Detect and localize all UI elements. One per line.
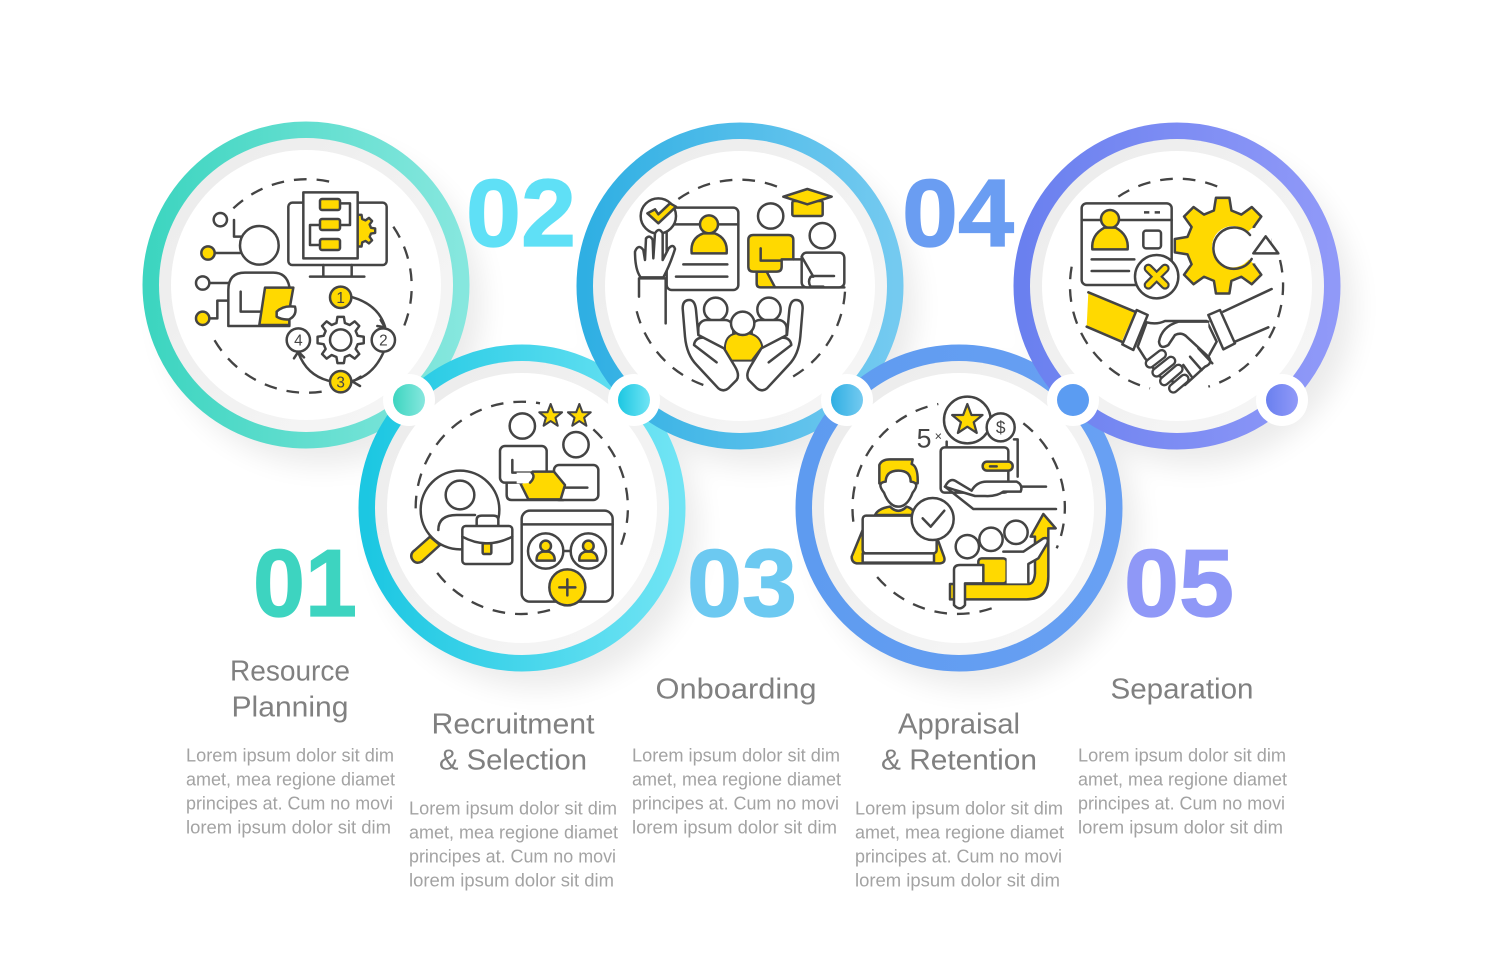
- text block 3: Onboarding: [632, 674, 841, 838]
- text block 4: Appraisal & Retention: principes at. Cum no movi: [855, 846, 1062, 866]
- icon: resource planning: 4: [294, 333, 303, 350]
- text block 4: Appraisal & Retention: [855, 708, 1064, 890]
- icon: appraisal and retention: ×: [935, 430, 942, 444]
- text block 1: Resource Planning: principes at. Cum no movi: [186, 794, 393, 814]
- text block 4: Appraisal & Retention: & Retention: [881, 744, 1037, 776]
- text block 5: Separation: Lorem ipsum dolor sit dim: [1078, 746, 1286, 766]
- text block 1: Resource Planning: Resource: [230, 656, 350, 688]
- icon: appraisal and retention: $: [996, 417, 1006, 437]
- text block 2: Recruitment & Selection: amet, mea regione diamet: [409, 822, 618, 842]
- icon: resource planning: [196, 179, 412, 393]
- text block 3: Onboarding: lorem ipsum dolor sit dim: [632, 818, 837, 838]
- number 05: 05: [1124, 530, 1234, 637]
- text block 5: Separation: lorem ipsum dolor sit dim: [1078, 818, 1283, 838]
- text block 3: Onboarding: amet, mea regione diamet: [632, 770, 841, 790]
- text block 2: Recruitment & Selection: Lorem ipsum dolor sit dim: [409, 798, 617, 818]
- connector nodes: [383, 374, 1308, 426]
- icon: separation: [1070, 179, 1283, 388]
- ring 2: [367, 353, 677, 663]
- text block 2: Recruitment & Selection: principes at. Cum no movi: [409, 846, 616, 866]
- icon: onboarding: [635, 180, 845, 390]
- text block 3: Onboarding: Lorem ipsum dolor sit dim: [632, 746, 840, 766]
- icon: appraisal and retention: [852, 397, 1065, 614]
- ring 3: [585, 131, 895, 441]
- text block 1: Resource Planning: [186, 656, 395, 838]
- text block 3: Onboarding: principes at. Cum no movi: [632, 794, 839, 814]
- text block 1: Resource Planning: amet, mea regione diamet: [186, 770, 395, 790]
- text block 1: Resource Planning: Lorem ipsum dolor sit dim: [186, 746, 394, 766]
- text block 2: Recruitment & Selection: Recruitment: [432, 708, 594, 740]
- text block 4: Appraisal & Retention: Lorem ipsum dolor sit dim: [855, 798, 1063, 818]
- soft drop shadows: [162, 145, 1354, 688]
- text block 1: Resource Planning: lorem ipsum dolor sit dim: [186, 818, 391, 838]
- number 02: 02: [466, 160, 576, 267]
- ring 1: [151, 130, 461, 440]
- text block 2: Recruitment & Selection: [409, 708, 618, 890]
- icon: resource planning: 2: [379, 333, 388, 350]
- icon: recruitment and selection: [411, 402, 628, 614]
- text block 5: Separation: [1078, 674, 1287, 838]
- text block 4: Appraisal & Retention: lorem ipsum dolor sit dim: [855, 870, 1060, 890]
- icon: appraisal and retention: 5: [917, 423, 931, 453]
- text block 5: Separation: amet, mea regione diamet: [1078, 770, 1287, 790]
- text block 5: Separation: Separation: [1110, 674, 1254, 706]
- text block 5: Separation: principes at. Cum no movi: [1078, 794, 1285, 814]
- number 01: 01: [253, 530, 357, 637]
- text block 4: Appraisal & Retention: amet, mea regione diamet: [855, 822, 1064, 842]
- ring 4: [804, 353, 1114, 663]
- ring 5: [1022, 131, 1332, 441]
- icon: resource planning: 1: [336, 290, 345, 307]
- text block 1: Resource Planning: Planning: [232, 692, 348, 724]
- text block 4: Appraisal & Retention: Appraisal: [898, 708, 1020, 740]
- number 04: 04: [902, 160, 1014, 267]
- icon: resource planning: 3: [336, 374, 345, 391]
- text block 2: Recruitment & Selection: & Selection: [439, 744, 587, 776]
- number 03: 03: [687, 530, 797, 637]
- text block 2: Recruitment & Selection: lorem ipsum dolor sit dim: [409, 870, 614, 890]
- text block 3: Onboarding: Onboarding: [656, 674, 816, 706]
